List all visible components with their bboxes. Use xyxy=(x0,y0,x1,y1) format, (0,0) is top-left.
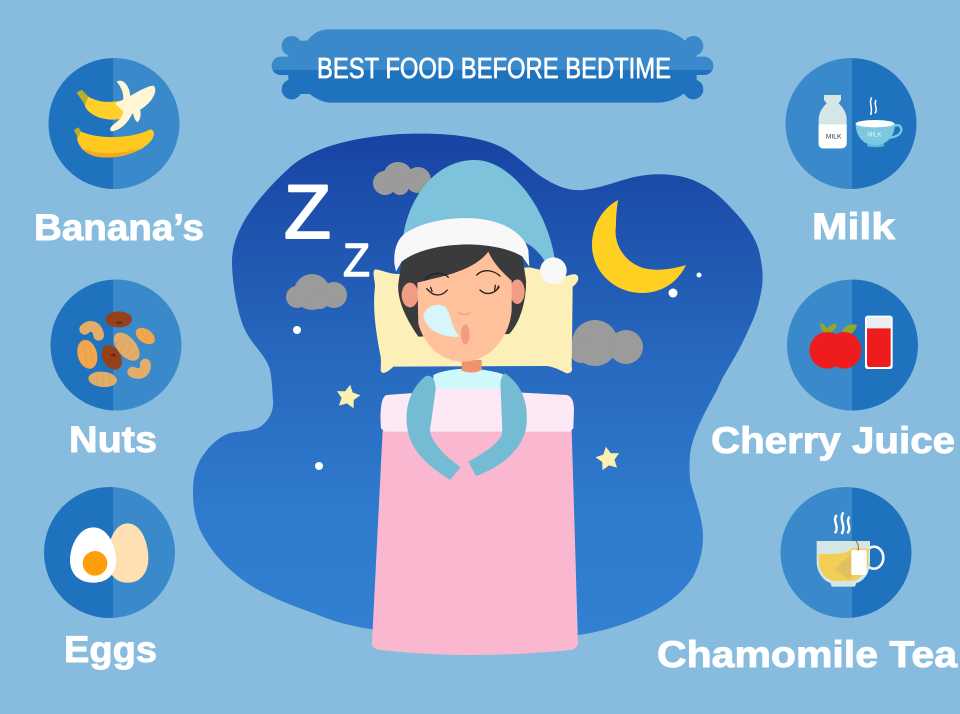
icon: cloud left xyxy=(286,274,347,310)
panel: eggs xyxy=(44,487,175,670)
big Z: Z xyxy=(284,170,331,255)
panel: cherry juice xyxy=(711,270,955,461)
shirt xyxy=(433,369,505,388)
ears xyxy=(402,279,525,307)
icon: milk bottle and cup: MILK xyxy=(867,133,881,139)
hat xyxy=(403,160,555,262)
left arm xyxy=(406,376,461,480)
circle badge xyxy=(50,280,182,410)
panel: bananas xyxy=(34,50,204,248)
panel: milk xyxy=(786,58,916,240)
icon: cherries and juice glass xyxy=(809,316,893,369)
mouth xyxy=(461,324,470,344)
snot bubble xyxy=(423,305,460,337)
icon: eggs xyxy=(70,523,148,583)
title text: BEST FOOD BEFORE BEDTIME xyxy=(317,53,671,85)
hair xyxy=(398,244,526,337)
night sky blob xyxy=(193,134,763,640)
label: Nuts xyxy=(69,419,157,460)
sleeping person xyxy=(372,160,578,655)
panel: nuts xyxy=(50,280,182,453)
circle badge xyxy=(787,280,918,410)
panel: chamomile tea xyxy=(657,480,957,675)
label: Chamomile Tea xyxy=(657,634,957,675)
icon: bananas xyxy=(74,81,155,158)
label: Banana’s xyxy=(34,207,204,248)
circle badge xyxy=(786,58,916,189)
small Z: Z xyxy=(343,234,370,286)
icon: cloud top xyxy=(373,162,431,195)
icon: cloud right xyxy=(570,320,643,366)
icon: milk bottle and cup xyxy=(819,95,901,148)
title banner xyxy=(272,29,713,103)
pillow xyxy=(374,267,578,373)
face xyxy=(417,252,512,362)
banner shape xyxy=(272,29,713,103)
circle badge xyxy=(780,487,912,618)
icon: moon xyxy=(592,200,686,293)
icon: milk bottle and cup: MILK xyxy=(826,133,842,140)
label: Eggs xyxy=(64,629,157,670)
right arm xyxy=(468,373,527,476)
icon: nuts xyxy=(74,311,158,388)
sky dots xyxy=(293,272,702,470)
eyes and brows xyxy=(425,271,500,295)
circle badge xyxy=(48,58,180,189)
head xyxy=(394,160,567,362)
icon: tea cup xyxy=(817,512,883,587)
label: Cherry Juice xyxy=(711,420,955,461)
blanket xyxy=(372,430,578,655)
blanket fold xyxy=(381,387,574,432)
icon: star left xyxy=(335,383,362,409)
bed and body xyxy=(372,360,578,655)
circle badge xyxy=(44,487,175,618)
icon: star right xyxy=(594,445,621,471)
neck xyxy=(462,360,482,373)
nose xyxy=(458,313,470,314)
hat band xyxy=(394,218,529,272)
hat pompom xyxy=(540,257,567,284)
label: Milk xyxy=(812,206,895,247)
